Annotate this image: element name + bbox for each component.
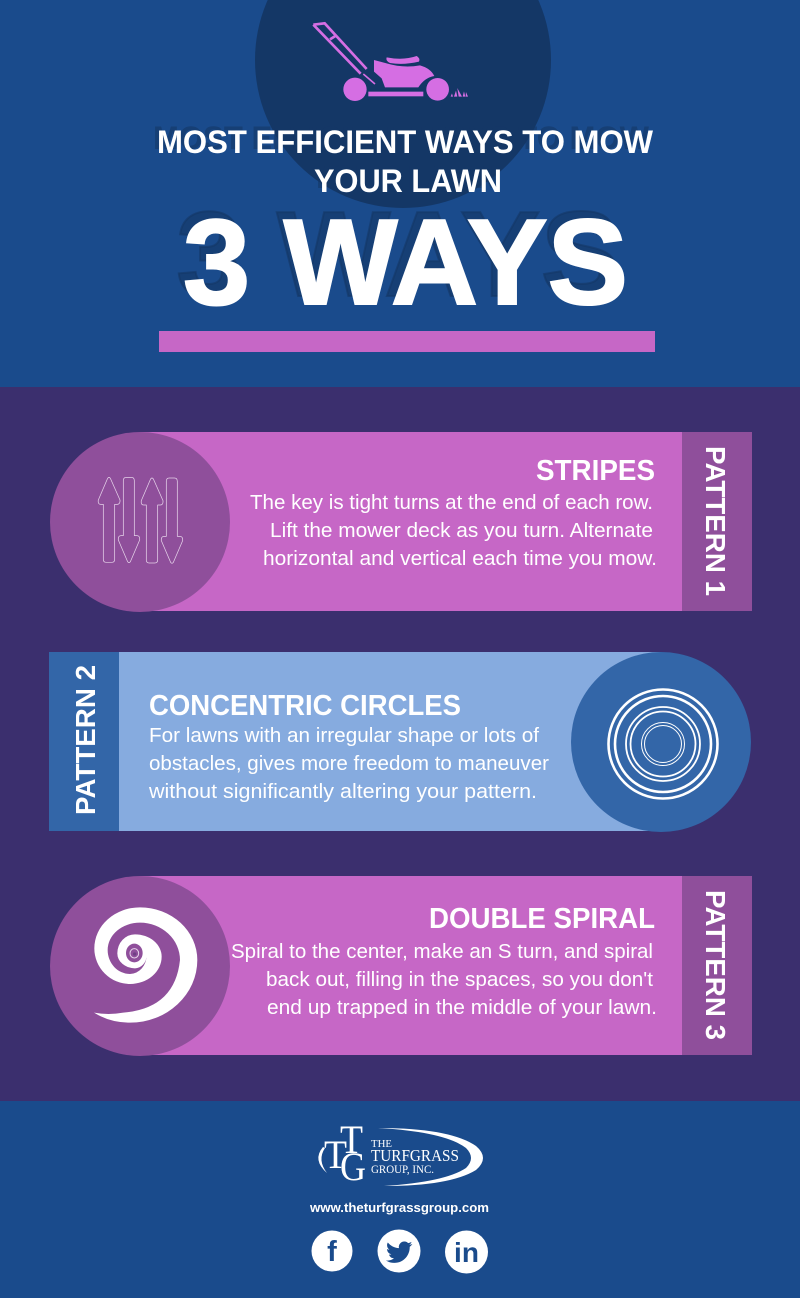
panel: patterns background [0,387,800,1101]
heading: 3 ways: 3 WAYS [183,194,628,330]
text: stripes description: horizontal and vertical each time you mow. [263,548,657,570]
heading: concentric circles: CONCENTRIC CIRCLES [149,690,461,722]
header bar [159,331,655,352]
title [153,120,654,199]
icon: facebook [312,1230,352,1272]
label: pattern 2: PATTERN 2 [70,665,101,815]
panel: header [0,0,800,387]
logo: The Turfgrass Group: T [340,1117,363,1162]
icon: linkedin: in [454,1237,479,1268]
logo: The Turfgrass Group: GROUP, INC. [371,1162,434,1176]
text: concentric circles description: For lawns with an irregular shape or lots of [149,725,539,747]
text: double spiral description: end up trapped in the middle of your lawn. [267,997,657,1019]
logo: The Turfgrass Group: T [324,1132,347,1177]
heading: double spiral: DOUBLE SPIRAL [429,903,655,935]
text: stripes description: The key is tight turns at the end of each row. [250,492,653,514]
icon: double spiral [50,876,230,1056]
label: pattern 1: PATTERN 1 [700,446,731,596]
icon: stripes arrows [50,432,230,612]
panel: pattern 3 double spiral [50,876,752,1056]
logo: The Turfgrass Group: THE [371,1138,392,1150]
title: MOST EFFICIENT WAYS TO MOW [157,124,654,160]
text: concentric circles description [148,725,549,803]
logo: The Turfgrass Group [318,1117,483,1189]
title: YOUR LAWN [314,163,502,199]
text: stripes description: Lift the mower deck as you turn. Alternate [270,520,653,542]
heading: stripes: STRIPES [536,455,655,487]
text: concentric circles description: without significantly altering your pattern. [148,781,537,803]
title: MOST EFFICIENT WAYS TO MOW [153,120,650,156]
text: double spiral description [231,941,657,1019]
title: YOUR LAWN [310,159,498,195]
logo: The Turfgrass Group: TURFGRASS [371,1146,459,1165]
icon: lawn mower [255,0,551,208]
text: concentric circles description: obstacles, gives more freedom to maneuver [149,753,549,775]
text: double spiral description: Spiral to the center, make an S turn, and spiral [231,941,653,963]
label: pattern 3: PATTERN 3 [700,890,731,1040]
icon: facebook: f [327,1236,337,1268]
logo: The Turfgrass Group: G [340,1144,366,1189]
icon: twitter [378,1230,420,1272]
text: double spiral description: back out, filling in the spaces, so you don't [266,969,653,991]
panel: pattern 1 stripes [50,432,752,612]
heading: 3 ways: 3 WAYS [176,186,621,322]
icon: concentric circles [571,652,751,832]
icon: linkedin [445,1230,488,1274]
panel: footer [0,1101,800,1298]
text: website: www.theturfgrassgroup.com [309,1200,489,1215]
panel: pattern 2 concentric circles [49,652,751,832]
text: stripes description [250,492,657,570]
